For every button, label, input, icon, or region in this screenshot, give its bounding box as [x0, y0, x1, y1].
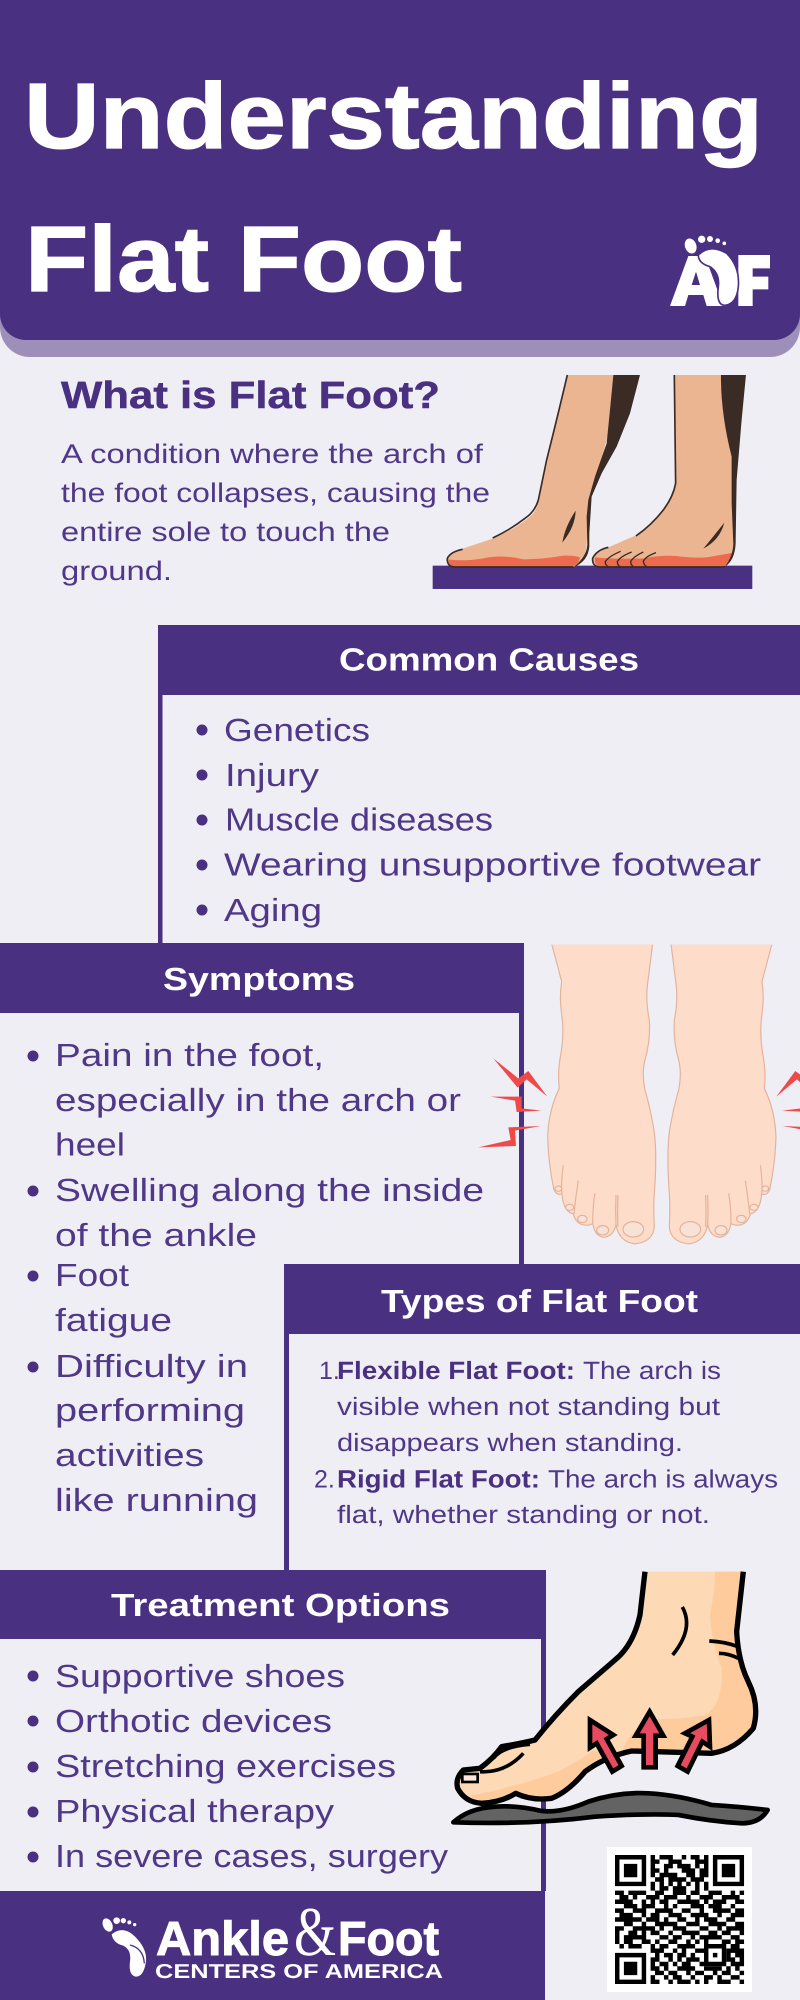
- title: [24, 64, 763, 311]
- types list: The arch is always: [548, 1466, 778, 1494]
- heading bar: common causes: Common Causes: [339, 642, 639, 678]
- symptoms list: especially in the arch or: [55, 1082, 461, 1118]
- title: Understanding: [24, 64, 763, 168]
- foot: [457, 1572, 756, 1803]
- symptoms list: like running: [55, 1482, 258, 1518]
- panel: what is flat foot: [61, 375, 490, 586]
- treatment list: In severe cases, surgery: [55, 1838, 448, 1874]
- causes list: [196, 712, 761, 928]
- definition text: the foot collapses, causing the: [61, 478, 490, 508]
- symptoms list: fatigue: [55, 1302, 172, 1338]
- causes list: Injury: [225, 757, 319, 793]
- heading bar: treatment options: Treatment Options: [111, 1587, 450, 1623]
- causes list: Aging: [224, 892, 322, 928]
- panel: symptoms: [0, 943, 524, 1518]
- wordmark: CENTERS OF AMERICA: [155, 1961, 443, 1983]
- footer logo: [100, 1894, 443, 1983]
- illustration: feet from above with pain marks: [478, 943, 800, 1244]
- treatment list: Orthotic devices: [55, 1703, 332, 1739]
- insole: [453, 1793, 768, 1823]
- illustration: flat feet side view: [433, 375, 752, 589]
- types list: visible when not standing but: [337, 1393, 720, 1421]
- icon: right foot: [668, 944, 776, 1244]
- symptoms list: Pain in the foot,: [55, 1037, 324, 1073]
- symptoms list: [28, 1037, 484, 1518]
- symptoms list: Swelling along the inside: [55, 1172, 484, 1208]
- definition text: ground.: [61, 556, 172, 586]
- treatment list: [28, 1658, 448, 1874]
- heading bar: symptoms: Symptoms: [163, 961, 355, 997]
- types list: Rigid Flat Foot:: [337, 1466, 540, 1494]
- icon: pain marks right: [776, 1058, 800, 1147]
- symptoms list: Foot: [55, 1257, 129, 1293]
- panel: types of flat foot: [284, 1264, 800, 1570]
- heading: what is flat foot: What is Flat Foot?: [61, 375, 440, 417]
- wordmark: Ankle: [156, 1913, 289, 1966]
- icon: pain marks left: [478, 1058, 547, 1147]
- heading bar: types of flat foot: [284, 1264, 800, 1334]
- symptoms list: heel: [55, 1126, 125, 1162]
- header banner: [0, 0, 800, 357]
- treatment list: Physical therapy: [55, 1793, 334, 1829]
- heading bar: treatment options: [0, 1570, 546, 1639]
- symptoms list: activities: [55, 1437, 204, 1473]
- types list: 1.: [319, 1357, 340, 1385]
- definition text: entire sole to touch the: [61, 517, 390, 547]
- definition text: A condition where the arch of: [61, 439, 484, 469]
- QR code: [607, 1847, 752, 1992]
- causes list: Genetics: [224, 712, 370, 748]
- types list: 2.: [314, 1466, 335, 1494]
- types list: The arch is: [583, 1357, 721, 1385]
- causes list: Muscle diseases: [225, 802, 493, 838]
- title: Flat Foot: [25, 207, 462, 311]
- wordmark: Foot: [338, 1913, 439, 1966]
- heading bar: symptoms: [0, 943, 524, 1013]
- arrows: arch lift: [590, 1712, 710, 1772]
- icon: left foot: [548, 944, 656, 1244]
- types list: flat, whether standing or not.: [337, 1501, 710, 1529]
- causes list: Wearing unsupportive footwear: [224, 846, 761, 882]
- heading bar: common causes: [158, 625, 800, 695]
- icon: foot mark: [100, 1917, 146, 1977]
- definition text: [61, 439, 490, 586]
- wordmark: &: [294, 1894, 336, 1971]
- panel: common causes: [158, 625, 800, 943]
- types list: Flexible Flat Foot:: [337, 1357, 575, 1385]
- logo: AF foot mark: [670, 236, 770, 306]
- symptoms list: performing: [55, 1392, 245, 1428]
- treatment list: Stretching exercises: [55, 1748, 396, 1784]
- types list: disappears when standing.: [337, 1429, 683, 1457]
- wordmark: [155, 1894, 443, 1983]
- symptoms list: of the ankle: [55, 1217, 257, 1253]
- symptoms list: Difficulty in: [55, 1348, 248, 1384]
- footer bar: [0, 1891, 545, 2000]
- treatment list: Supportive shoes: [55, 1658, 345, 1694]
- panel: treatment options: [0, 1570, 546, 1891]
- heading bar: types of flat foot: Types of Flat Foot: [381, 1283, 698, 1319]
- illustration: foot with arch support insole: [453, 1572, 768, 1823]
- types list: [314, 1357, 778, 1529]
